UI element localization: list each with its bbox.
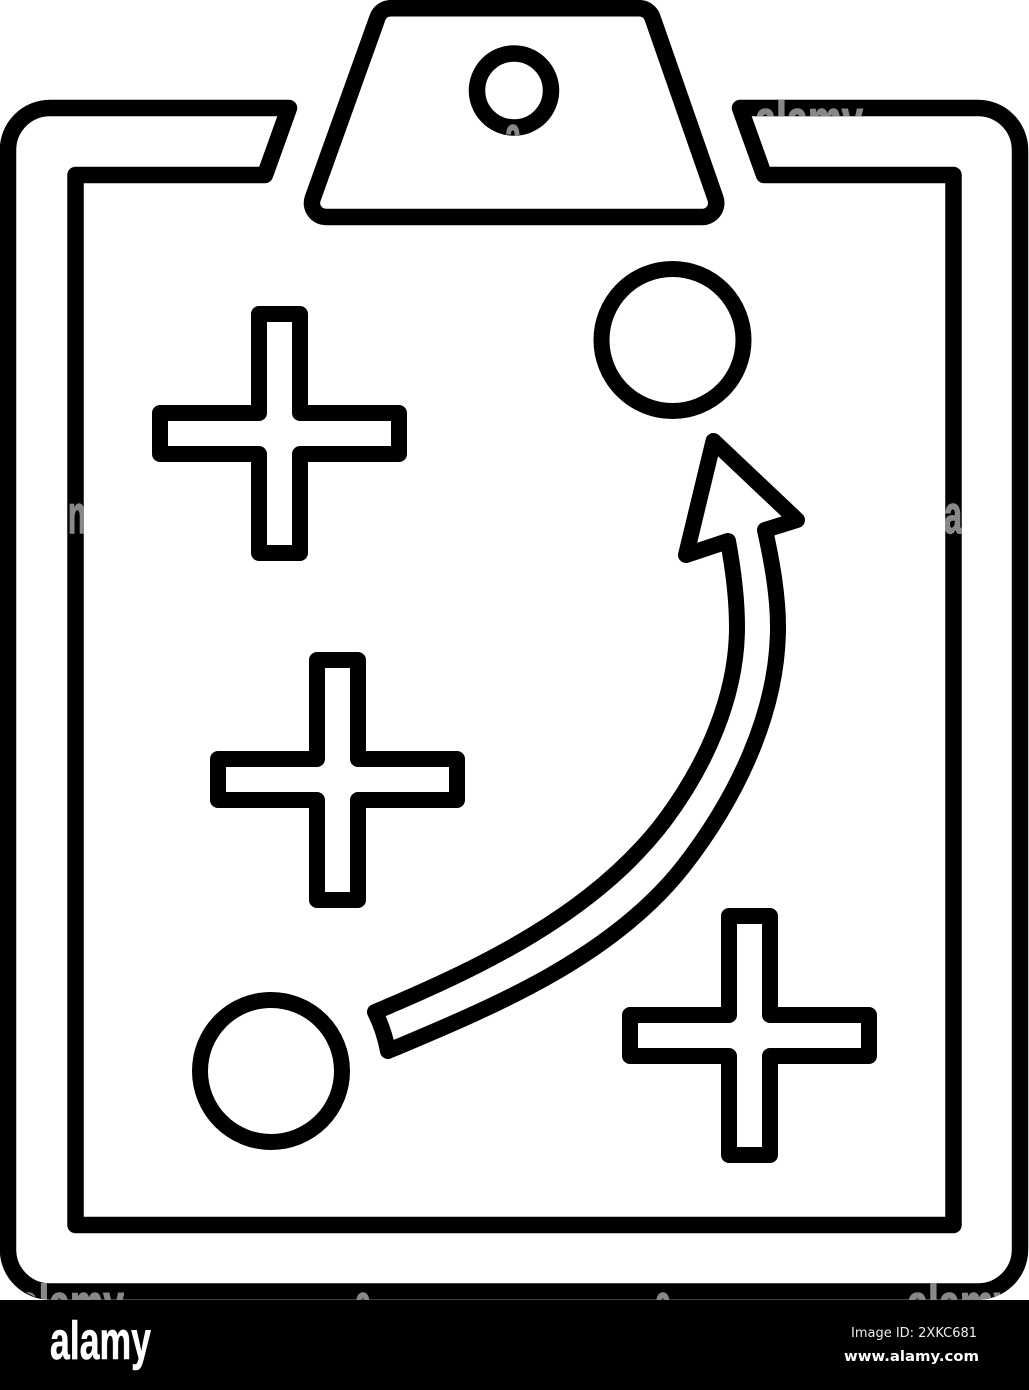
website text: www.alamy.com — [844, 1349, 979, 1365]
footer logo text: alamy — [50, 1311, 151, 1371]
watermark fragments on strokes: a — [944, 485, 963, 545]
circle marker top — [602, 269, 744, 411]
curved play arrow — [375, 441, 797, 1051]
plus marker top left — [160, 314, 399, 553]
image id text: Image ID: 2XKC681 — [851, 1325, 977, 1341]
clip on top of clipboard — [312, 8, 716, 217]
black footer bar — [0, 1300, 1029, 1390]
watermark fragments on strokes: a — [655, 1274, 672, 1334]
plus marker bottom right — [630, 916, 869, 1155]
watermark fragments on strokes: a — [505, 106, 522, 166]
plus marker middle — [218, 660, 457, 900]
circle marker bottom — [200, 1000, 342, 1142]
watermark fragments on strokes: alamy — [18, 1274, 124, 1334]
watermark fragments on strokes: a — [355, 1274, 372, 1334]
watermark fragments on strokes: n — [68, 485, 86, 545]
watermark fragments on strokes: alamy — [755, 90, 863, 150]
